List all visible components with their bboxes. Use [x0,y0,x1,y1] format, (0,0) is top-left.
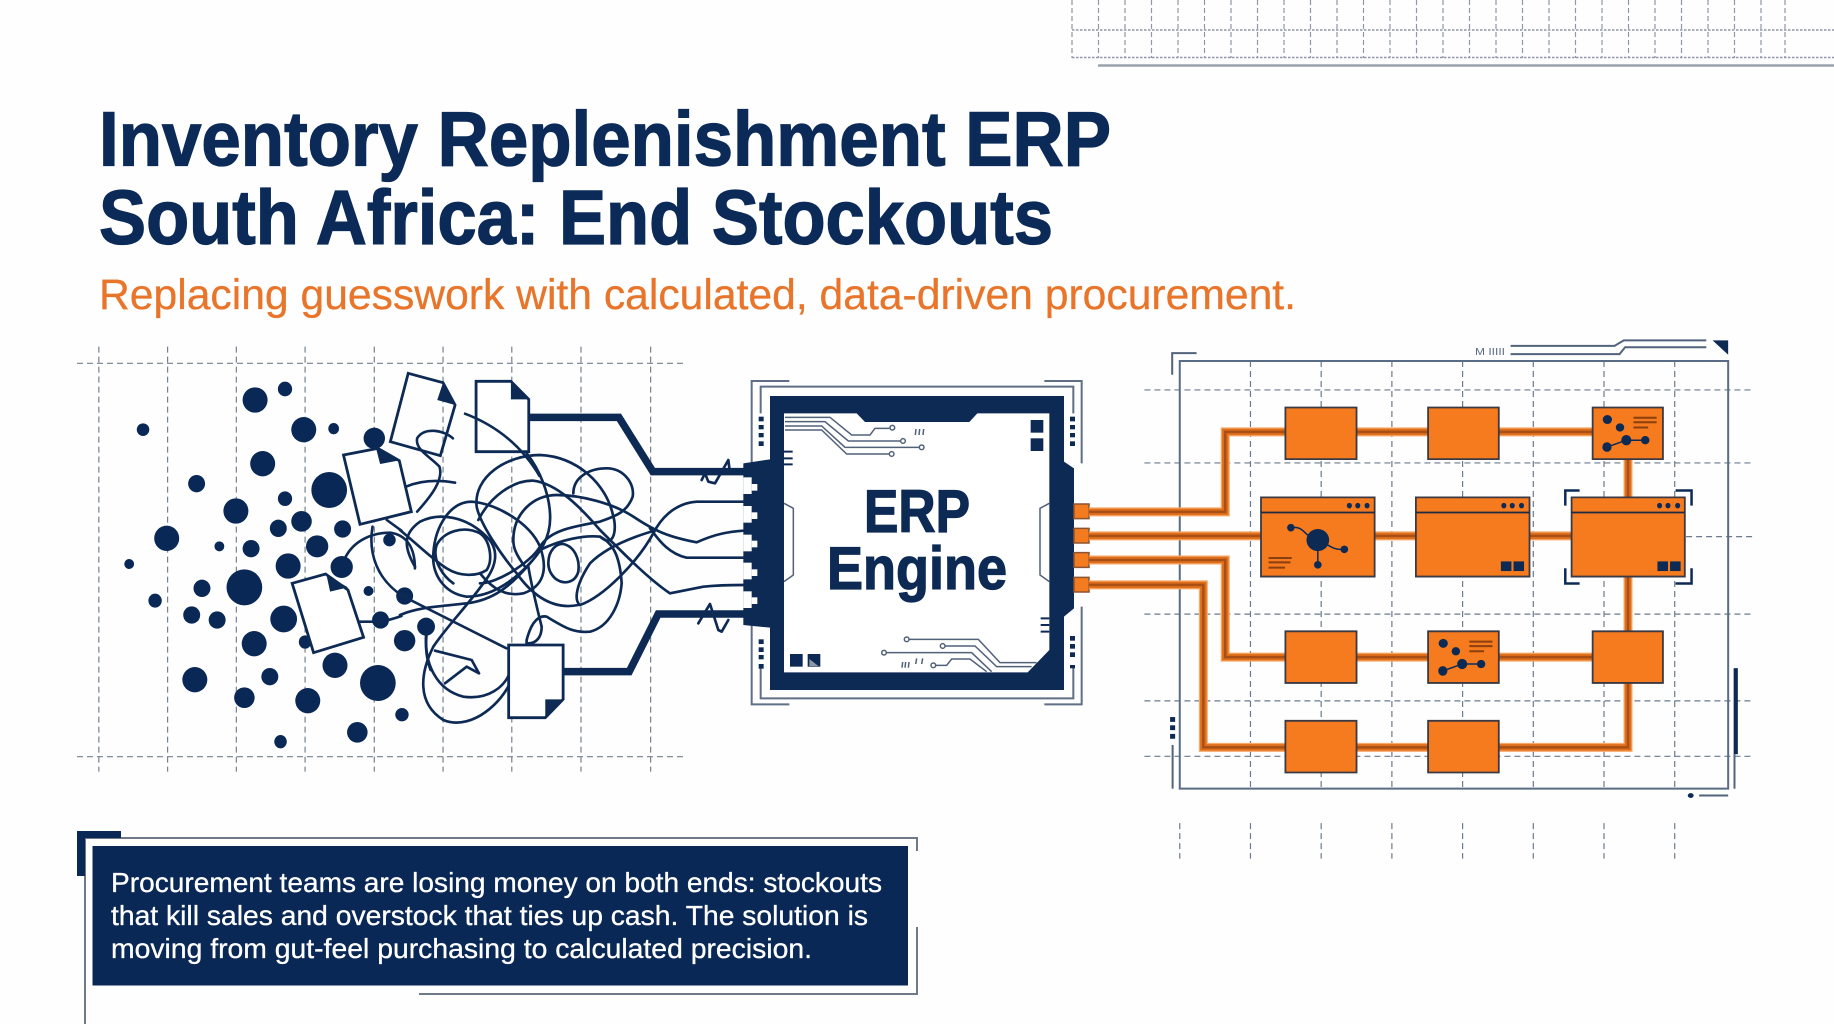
frame decorations [1172,340,1734,796]
chip side rail dots [759,417,1075,669]
outer frame [1180,361,1728,789]
process boxes [1261,407,1685,772]
subtitle: Replacing guesswork with calculated, data-driven procurement. [99,271,1296,319]
chip left pin notches [743,477,757,608]
icon: network in top box [1602,415,1657,452]
thick connectors from documents to engine [529,417,745,672]
chip label: ERP [864,478,970,545]
small frame code label: M IIIII [1475,347,1505,358]
icon: network in window [1269,524,1348,569]
window title bars [1261,512,1685,514]
top-right grid decoration [1072,0,1834,66]
document icons [292,373,563,718]
chip orange output pins [1074,504,1089,592]
title: Inventory Replenishment ERP [99,96,1111,182]
panel: organized workflow grid [1089,340,1753,859]
chip squares [790,420,1043,667]
callout text: Procurement teams are losing money on both ends: stockouts [111,867,882,898]
chip label [827,478,1007,602]
scattered data dots [124,382,435,748]
icon: network in lower box [1438,639,1492,676]
chip white face [784,413,1049,672]
title [99,96,1111,261]
chip outer brackets [752,381,1082,704]
callout text: moving from gut-feel purchasing to calculated precision. [111,933,812,964]
ERP Engine chip [743,381,1089,704]
callout panel [77,831,917,1024]
line crossing document [464,413,540,477]
callout text [111,867,882,964]
panel: chaotic inputs [77,347,745,772]
tangled lines [400,453,743,723]
callout text: that kill sales and overstock that ties up cash. The solution is [111,900,868,931]
chip body [743,396,1074,690]
chip circuit traces [784,417,1049,672]
selection brackets around window [1565,490,1692,583]
title: South Africa: End Stockouts [99,175,1053,261]
tangled lines near documents [346,431,506,670]
chip label: Engine [827,535,1007,602]
orange connection paths [1089,432,1628,747]
